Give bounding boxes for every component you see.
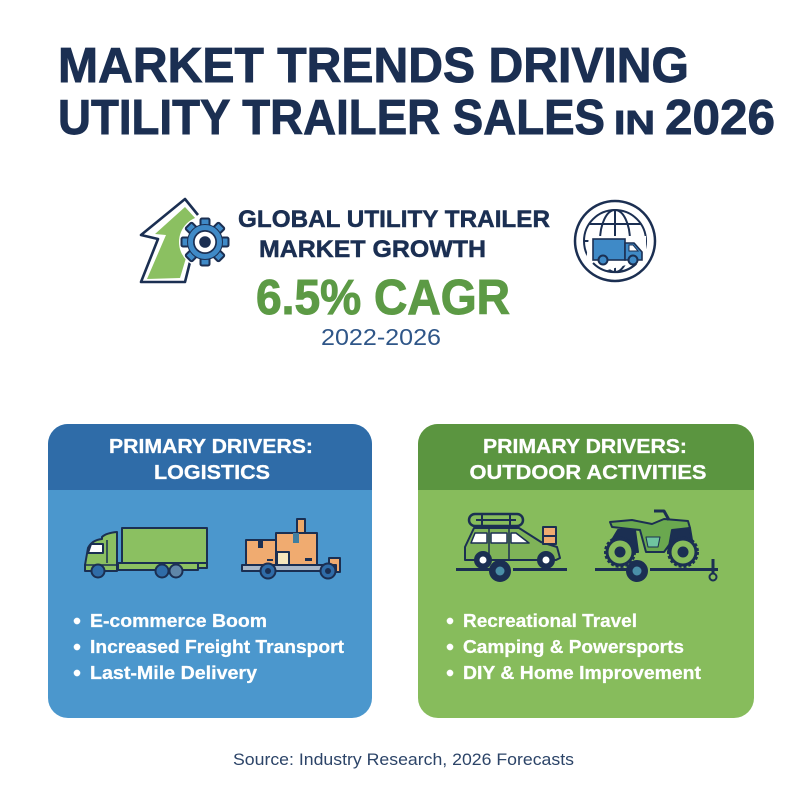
title [58, 39, 775, 145]
statistic: 6.5% CAGR: 6.5% CAGR [256, 271, 510, 325]
list: outdoor drivers: DIY & Home Improvement [463, 662, 701, 683]
icon: green truck [84, 528, 207, 578]
list: outdoor drivers [447, 610, 701, 683]
icon: boxes on trailer [242, 519, 340, 578]
heading: global market growth: GLOBAL UTILITY TRAILER [238, 206, 550, 233]
heading: primary drivers outdoor: PRIMARY DRIVERS: [483, 435, 687, 458]
heading: primary drivers logistics: PRIMARY DRIVERS: [109, 435, 313, 458]
icon: SUV on trailer [456, 514, 567, 581]
title: UTILITY TRAILER SALES [58, 91, 605, 145]
list: logistics drivers: Increased Freight Transport [90, 636, 344, 657]
heading: primary drivers logistics: LOGISTICS [154, 461, 270, 484]
list: outdoor drivers: Recreational Travel [463, 610, 637, 631]
heading: global market growth: MARKET GROWTH [259, 236, 486, 263]
title: 2026 [665, 91, 775, 145]
heading: primary drivers logistics [109, 435, 313, 484]
source note: Source: Industry Research, 2026 Forecasts [233, 751, 574, 769]
list: logistics drivers: Last-Mile Delivery [90, 662, 258, 683]
heading: primary drivers outdoor: OUTDOOR ACTIVITIES [470, 461, 706, 484]
list: logistics drivers: E-commerce Boom [90, 610, 267, 631]
panel: logistics [48, 424, 372, 718]
icon: growth arrow with gear [141, 199, 231, 282]
title: IN [614, 104, 655, 141]
panel: outdoor activities [418, 424, 754, 718]
panel header: outdoor activities [418, 424, 754, 490]
list: outdoor drivers: Camping & Powersports [463, 636, 684, 657]
panel header: logistics [48, 424, 372, 490]
heading: global market growth [238, 206, 550, 263]
title: MARKET TRENDS DRIVING [58, 39, 689, 93]
icon: ATV on trailer [595, 511, 718, 581]
date range: 2022-2026 [321, 324, 441, 350]
icon: globe with truck [575, 201, 655, 281]
list: logistics drivers [74, 610, 344, 683]
heading: primary drivers outdoor [470, 435, 706, 484]
